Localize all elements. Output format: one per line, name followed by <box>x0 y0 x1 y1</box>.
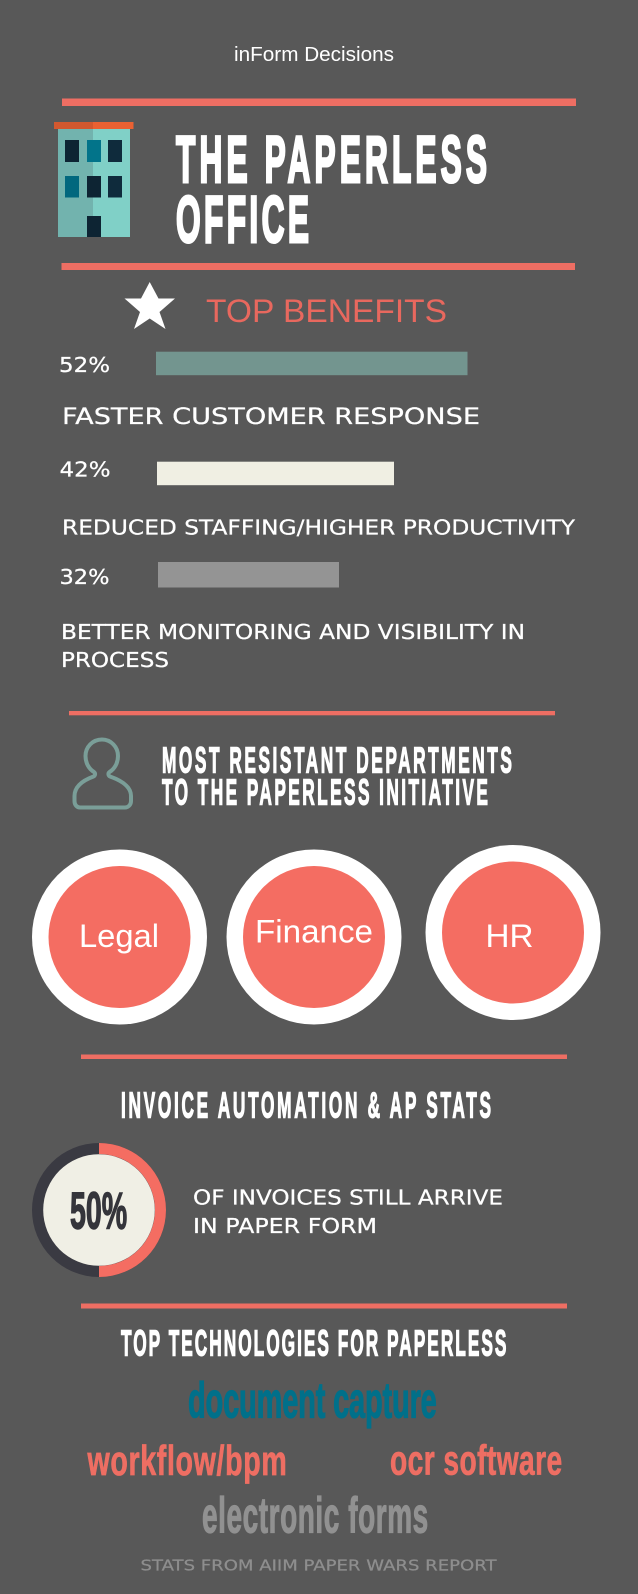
benefit 3: label: PROCESS <box>61 648 169 672</box>
header rule bottom <box>62 263 575 270</box>
divider <box>81 1304 567 1308</box>
tech: electronic forms: electronic forms <box>202 1487 428 1544</box>
invoice stat text: IN PAPER FORM <box>193 1214 377 1238</box>
circle: Legal: Legal <box>79 918 159 954</box>
divider <box>81 1054 567 1059</box>
benefit 3: label <box>61 620 525 672</box>
circle: HR: HR <box>486 918 534 954</box>
benefit 1: label: FASTER CUSTOMER RESPONSE <box>62 405 480 430</box>
donut chart: 50% <box>32 1143 166 1277</box>
heading: top technologies: TOP TECHNOLOGIES FOR PAPERLESS <box>121 1322 506 1363</box>
tech: workflow/bpm: workflow/bpm <box>87 1436 287 1484</box>
brand name: inForm Decisions <box>234 43 394 66</box>
benefit 3: percentage: 32% <box>60 565 110 589</box>
benefit 3: bar <box>158 562 339 588</box>
header rule top <box>62 98 576 106</box>
circle: HR <box>426 845 600 1020</box>
invoice stat text: OF INVOICES STILL ARRIVE <box>193 1186 503 1210</box>
icon: star <box>124 282 175 329</box>
title: OFFICE <box>176 182 309 256</box>
benefit 1: percentage: 52% <box>59 353 110 377</box>
source note: STATS FROM AIIM PAPER WARS REPORT <box>140 1556 497 1574</box>
invoice stat text <box>193 1186 503 1238</box>
heading: most resistant departments: TO THE PAPERLESS INITIATIVE <box>162 771 488 812</box>
benefit 2: bar <box>157 462 394 485</box>
heading: top benefits: TOP BENEFITS <box>206 293 447 329</box>
benefit 2: percentage: 42% <box>60 458 110 482</box>
heading: invoice automation: INVOICE AUTOMATION & AP STATS <box>121 1084 491 1125</box>
circle: Legal <box>32 850 207 1024</box>
icon: person outline <box>74 740 131 808</box>
divider <box>69 711 555 715</box>
tech: document capture: document capture <box>188 1372 437 1429</box>
circle: Finance <box>226 850 402 1024</box>
heading: most resistant departments <box>162 739 512 812</box>
title: THE PAPERLESS <box>176 122 487 196</box>
title <box>176 122 487 256</box>
circle: Finance: Finance <box>255 914 373 950</box>
tech: ocr software: ocr software <box>390 1437 562 1484</box>
benefit 1: bar <box>156 352 468 375</box>
donut chart: 50%: 50% <box>70 1181 127 1240</box>
benefit 3: label: BETTER MONITORING AND VISIBILITY IN <box>61 620 525 644</box>
benefit 2: label: REDUCED STAFFING/HIGHER PRODUCTIVITY <box>62 515 576 539</box>
heading: most resistant departments: MOST RESISTANT DEPARTMENTS <box>162 739 512 780</box>
icon: office building <box>54 122 134 237</box>
